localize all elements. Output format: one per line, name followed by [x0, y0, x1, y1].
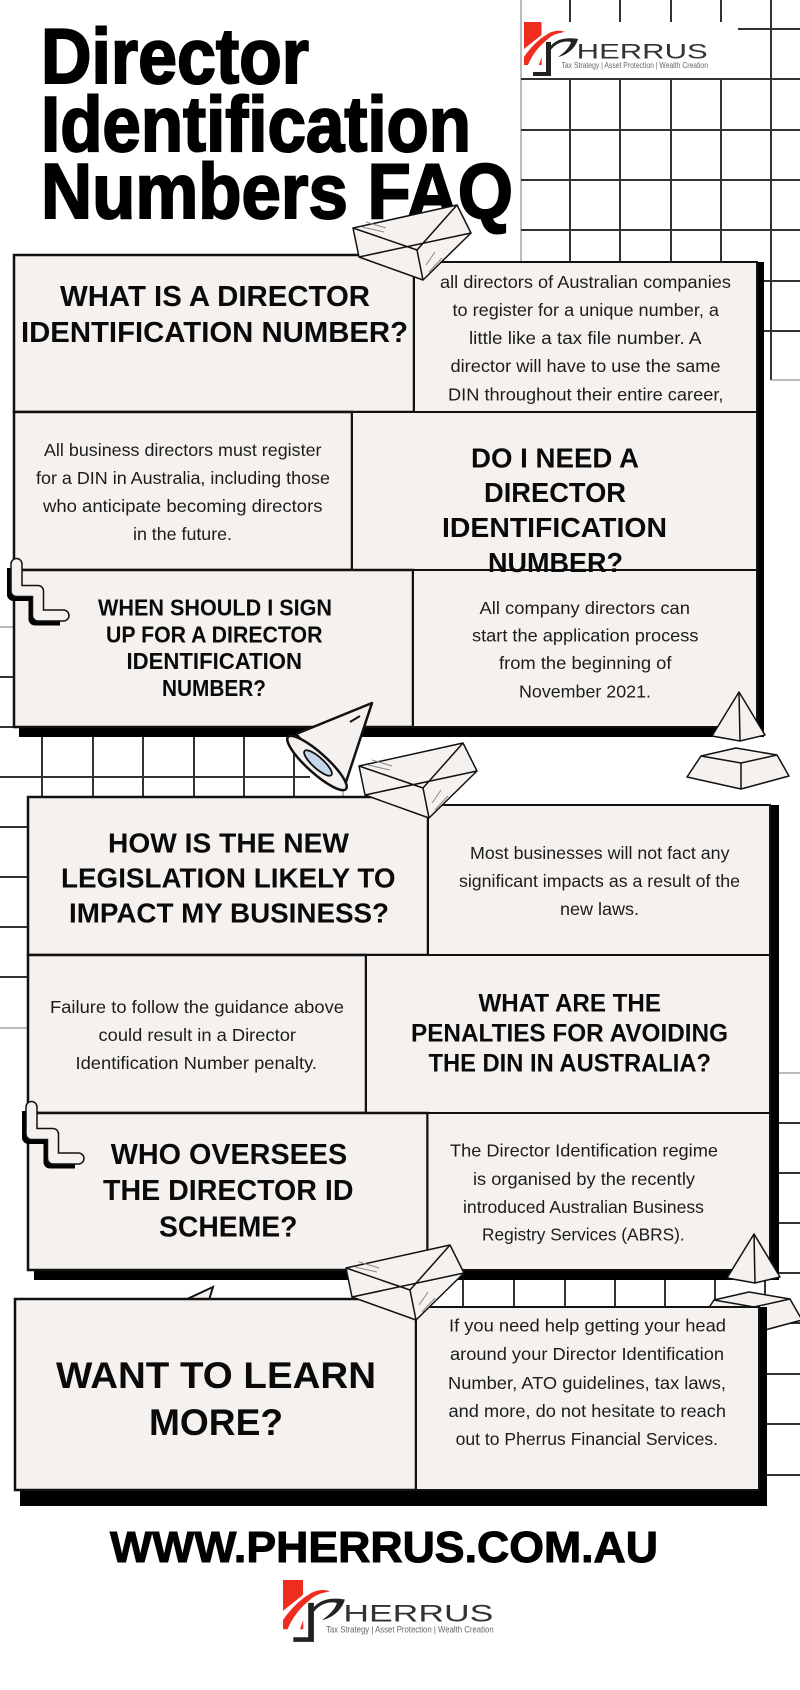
- text: what is a DIN: [440, 272, 731, 404]
- heading: when sign up: IDENTIFICATION: [126, 648, 302, 674]
- cell: do I need answer: [14, 412, 352, 570]
- icon: prism top: [353, 205, 471, 280]
- text: what is a DIN: all directors of Australian companies: [440, 272, 731, 292]
- cell: learn more question: [15, 1299, 416, 1490]
- website url: WWW.PHERRUS.COM.AU: [110, 1523, 658, 1572]
- icon: stair shape first block: [14, 564, 64, 619]
- icon: stair shape second block: [28, 1107, 78, 1162]
- top logo: [523, 22, 738, 78]
- heading: learn more: WANT TO LEARN: [56, 1355, 376, 1396]
- heading: when sign up: WHEN SHOULD I SIGN: [98, 594, 332, 620]
- icon: prism lower: [346, 1245, 464, 1320]
- title: Director: [41, 12, 309, 100]
- text: legislation impact: [459, 843, 740, 919]
- icon: frustum middle: [687, 748, 789, 789]
- text: legislation impact: significant impacts as a result of the: [459, 871, 740, 891]
- text: learn more: [448, 1316, 726, 1449]
- text: what is a DIN: little like a tax file number. A: [469, 328, 702, 348]
- text: do I need: who anticipate becoming directors: [42, 496, 323, 516]
- text: learn more: If you need help getting your head: [449, 1316, 726, 1336]
- heading: learn more: [56, 1355, 376, 1443]
- text: when sign up: from the beginning of: [499, 653, 672, 673]
- heading: do I need: DO I NEED A: [471, 442, 639, 474]
- heading: what is a DIN: WHAT IS A DIRECTOR: [60, 281, 370, 313]
- heading: when sign up: [98, 594, 332, 701]
- text: legislation impact: new laws.: [560, 899, 639, 919]
- heading: do I need: IDENTIFICATION: [442, 512, 667, 543]
- bottom logo: [283, 1580, 494, 1642]
- text: penalties: Failure to follow the guidance above: [50, 997, 344, 1017]
- cell: oversees question: [28, 1113, 428, 1270]
- text: do I need: for a DIN in Australia, including those: [36, 468, 330, 488]
- text: oversees: [450, 1141, 718, 1245]
- text: when sign up: November 2021.: [519, 682, 651, 702]
- title: Numbers FAQ: [41, 147, 513, 235]
- heading: legislation impact: IMPACT MY BUSINESS?: [69, 898, 389, 929]
- heading: legislation impact: LEGISLATION LIKELY TO: [61, 863, 396, 894]
- heading: what is a DIN: [21, 281, 408, 349]
- text: learn more: Number, ATO guidelines, tax laws,: [448, 1373, 726, 1393]
- icon: prism middle: [359, 743, 477, 818]
- cell: penalties question: [366, 955, 770, 1113]
- background grid: top right: [521, 0, 800, 380]
- heading: legislation impact: [61, 828, 396, 929]
- heading: do I need: [442, 442, 667, 578]
- panel: second FAQ block: [28, 797, 779, 1280]
- icon: frustum lower (behind last block): [700, 1292, 800, 1333]
- text: what is a DIN: director will have to use the same: [450, 356, 720, 376]
- cell: oversees answer: [428, 1113, 770, 1270]
- background grid: middle left: [0, 627, 343, 1028]
- text: when sign up: [472, 598, 699, 702]
- heading: what is a DIN: IDENTIFICATION NUMBER?: [21, 317, 408, 349]
- heading: penalties: WHAT ARE THE: [478, 990, 661, 1018]
- text: what is a DIN: DIN throughout their entire career,: [448, 384, 724, 404]
- cell: what is a DIN answer: [414, 262, 757, 412]
- text: penalties: could result in a Director: [98, 1025, 296, 1045]
- heading: when sign up: NUMBER?: [162, 675, 266, 701]
- icon: cone tip behind last block: [185, 1287, 213, 1300]
- text: learn more: around your Director Identification: [450, 1344, 724, 1364]
- text: do I need: [36, 440, 330, 544]
- cell: do I need question: [352, 412, 757, 570]
- text: penalties: [50, 997, 344, 1073]
- heading: oversees: [103, 1139, 354, 1244]
- text: learn more: and more, do not hesitate to reach: [448, 1401, 726, 1421]
- heading: when sign up: UP FOR A DIRECTOR: [106, 622, 323, 648]
- heading: penalties: THE DIN IN AUSTRALIA?: [428, 1050, 711, 1078]
- text: oversees: The Director Identification regime: [450, 1141, 718, 1161]
- text: oversees: is organised by the recently: [473, 1169, 695, 1189]
- text: do I need: in the future.: [133, 524, 232, 544]
- heading: oversees: WHO OVERSEES: [111, 1139, 347, 1171]
- cell: when sign up question: [14, 570, 413, 727]
- heading: legislation impact: HOW IS THE NEW: [108, 828, 350, 859]
- title: [41, 12, 513, 235]
- icon: pyramid middle: [712, 692, 765, 741]
- heading: oversees: THE DIRECTOR ID: [103, 1175, 354, 1207]
- cell: penalties answer: [28, 955, 366, 1113]
- text: when sign up: start the application process: [472, 626, 699, 646]
- text: legislation impact: Most businesses will not fact any: [470, 843, 730, 863]
- heading: do I need: DIRECTOR: [484, 477, 626, 508]
- icon: pyramid lower: [727, 1234, 780, 1283]
- heading: penalties: [411, 990, 728, 1078]
- panel: first FAQ block: [14, 255, 764, 737]
- icon: cone: [281, 703, 372, 797]
- heading: oversees: SCHEME?: [159, 1212, 298, 1244]
- text: when sign up: All company directors can: [480, 598, 690, 618]
- heading: learn more: MORE?: [149, 1402, 283, 1443]
- cell: legislation impact answer: [428, 805, 770, 955]
- text: learn more: out to Pherrus Financial Services.: [456, 1429, 718, 1449]
- heading: penalties: PENALTIES FOR AVOIDING: [411, 1020, 728, 1048]
- text: oversees: Registry Services (ABRS).: [482, 1225, 685, 1245]
- panel: want to learn more: [15, 1299, 767, 1506]
- text: oversees: introduced Australian Business: [463, 1197, 704, 1217]
- cell: when sign up answer: [413, 570, 757, 727]
- text: what is a DIN: to register for a unique number, a: [452, 300, 719, 320]
- cell: legislation impact question: [28, 797, 428, 955]
- text: do I need: All business directors must register: [44, 440, 322, 460]
- heading: do I need: NUMBER?: [488, 547, 623, 578]
- background grid: lower right: [463, 1073, 800, 1475]
- title: Identification: [41, 80, 471, 168]
- cell: learn more answer: [416, 1307, 759, 1490]
- cell: what is a DIN question: [14, 255, 414, 412]
- text: penalties: Identification Number penalty.: [76, 1053, 317, 1073]
